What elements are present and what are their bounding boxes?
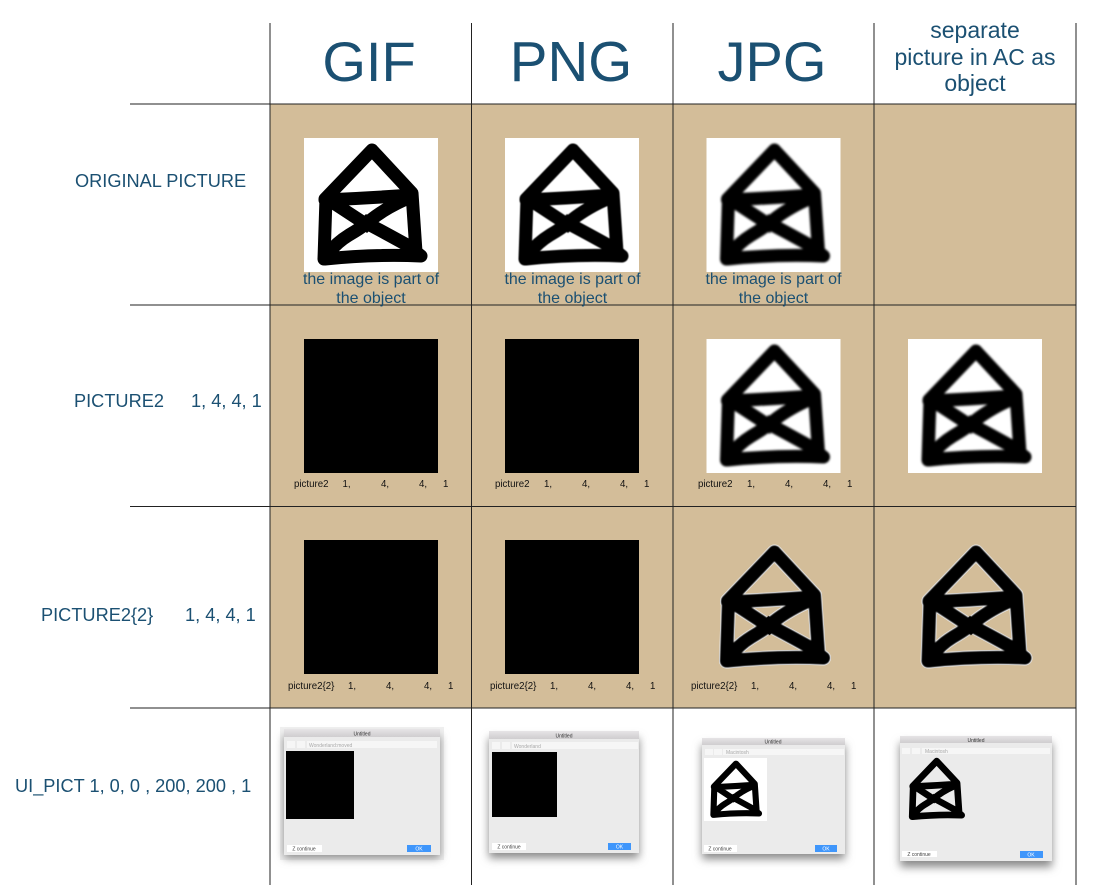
row labels: UI_PICT 1, 0, 0 , 200, 200 , 1 [15, 776, 251, 797]
row 1 captions: the object [538, 290, 608, 307]
row 4: PNG dialog screenshot: Untitled [556, 734, 573, 740]
row 2 small captions: 1 [644, 479, 649, 490]
row 4: PNG dialog screenshot [489, 731, 639, 858]
row 3: PNG black square [505, 540, 639, 674]
row labels: PICTURE2 [74, 391, 164, 411]
row 4: separate picture dialog screenshot: Untitled [968, 738, 985, 744]
row 1 captions: the image is part of [705, 271, 842, 288]
row 2: JPG picture [706, 339, 840, 473]
row 1 captions: the image is part of [504, 271, 641, 288]
row 3: separate transparent picture with halo [928, 552, 1025, 661]
row labels: 1, 4, 4, 1 [191, 391, 262, 411]
row 4: PNG dialog screenshot: Wonderland [514, 744, 541, 750]
column headers: separate [930, 17, 1020, 43]
row labels [15, 171, 262, 797]
row 4: PNG dialog screenshot: OK [616, 844, 624, 850]
row 4: separate picture dialog screenshot [900, 736, 1052, 867]
row 2 small captions: picture2 [294, 479, 328, 490]
column headers: picture in AC as [894, 44, 1056, 70]
row 4: separate picture dialog screenshot: OK [1027, 852, 1035, 858]
row 3 small captions: 1, [348, 681, 356, 692]
row 4: separate picture dialog screenshot: Macintosh [925, 749, 948, 755]
column headers: JPG [718, 30, 826, 93]
column headers: object [944, 70, 1006, 96]
row 4: GIF dialog screenshot: OK [415, 846, 423, 852]
column headers: PNG [510, 30, 632, 93]
row 2 small captions: 1, [544, 479, 552, 490]
row 3 small captions: picture2{2} [288, 681, 335, 692]
row 2 small captions: 1 [443, 479, 448, 490]
row 2 small captions: picture2 [495, 479, 529, 490]
row 4: GIF dialog screenshot: Z continue [292, 846, 316, 852]
row 3 small captions: 1, [751, 681, 759, 692]
row 4: JPG dialog screenshot: Z continue [708, 846, 732, 852]
row 4: GIF dialog screenshot [280, 727, 444, 860]
row 1 captions [303, 271, 842, 307]
row 2 small captions: 4, [823, 479, 831, 490]
row 3 small captions: 4, [424, 681, 432, 692]
row 4: GIF dialog screenshot: Wonderland:moved [309, 743, 352, 749]
row 2 small captions: 1 [847, 479, 852, 490]
row 4: JPG dialog screenshot: Untitled [765, 740, 782, 746]
row 3 small captions [288, 681, 856, 692]
row 1 captions: the object [336, 290, 406, 307]
row 2 small captions: 1, [747, 479, 755, 490]
row 2: PNG black square [505, 339, 639, 473]
row 4: JPG dialog screenshot: Macintosh [726, 750, 749, 756]
row 4: JPG dialog screenshot: OK [822, 846, 830, 852]
row 3 small captions: 4, [386, 681, 394, 692]
row labels: PICTURE2{2} [41, 605, 153, 625]
row 3 small captions: 4, [789, 681, 797, 692]
row 2 small captions: 4, [582, 479, 590, 490]
row 3 small captions: 1 [650, 681, 655, 692]
row 3 small captions: 1, [550, 681, 558, 692]
column headers [322, 17, 1056, 96]
row 3 small captions: 1 [448, 681, 453, 692]
row 2: separate picture [908, 339, 1042, 473]
row 3: JPG transparent picture with halo [726, 552, 824, 661]
row 2: GIF black square [304, 339, 438, 473]
row 3 small captions: 4, [588, 681, 596, 692]
row 2 small captions: 4, [785, 479, 793, 490]
row 1 captions: the object [739, 290, 809, 307]
row 3 small captions: picture2{2} [691, 681, 738, 692]
column headers: GIF [322, 30, 416, 93]
row labels: 1, 4, 4, 1 [185, 605, 256, 625]
row 3 small captions: 1 [851, 681, 856, 692]
row 2 small captions: 1, [342, 479, 351, 490]
row 4: GIF dialog screenshot: Untitled [354, 732, 371, 738]
row 4: separate picture dialog screenshot: Z continue [907, 852, 931, 858]
row 1: GIF original picture [304, 138, 438, 272]
row 1: JPG original picture [706, 138, 840, 272]
row 4: PNG dialog screenshot: Z continue [497, 844, 521, 850]
row 3 small captions: 4, [626, 681, 634, 692]
row 2 small captions: 4, [381, 479, 389, 490]
row 1: PNG original picture [505, 138, 639, 272]
row 3 small captions: picture2{2} [490, 681, 537, 692]
row 2 small captions: 4, [620, 479, 628, 490]
row 3 small captions: 4, [827, 681, 835, 692]
row labels: ORIGINAL PICTURE [75, 171, 246, 191]
row 4: JPG dialog screenshot [702, 738, 845, 859]
row 1 captions: the image is part of [303, 271, 440, 288]
row 2 small captions [294, 479, 852, 490]
row 2 small captions: 4, [419, 479, 427, 490]
row 2 small captions: picture2 [698, 479, 732, 490]
row 3: GIF black square [304, 540, 438, 674]
tan table background [270, 104, 1076, 708]
